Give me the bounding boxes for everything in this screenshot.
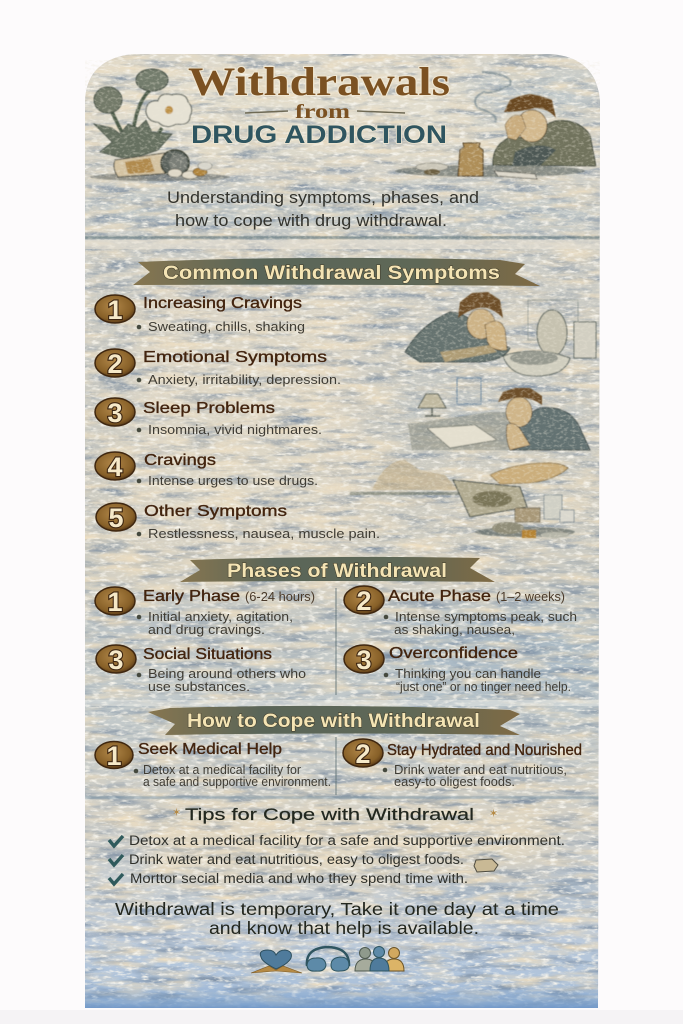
phase: social situations: Being around others who bbox=[148, 666, 306, 681]
illustration grain overlay bbox=[85, 60, 600, 550]
badge 5 bbox=[96, 503, 136, 533]
badge 4 bbox=[95, 452, 135, 482]
coping: stay hydrated bbox=[343, 739, 582, 789]
badge 1: 1 bbox=[107, 587, 123, 617]
badge 2: 2 bbox=[355, 739, 371, 769]
page bottom shadow strip bbox=[0, 1010, 683, 1024]
tips checklist: Detox at a medical facility for a safe and supportive environment. bbox=[129, 833, 565, 848]
subtitle: how to cope with drug withdrawal. bbox=[175, 211, 447, 230]
phase: early: and drug cravings. bbox=[148, 622, 265, 637]
tips heading: Tips for Cope with Withdrawal bbox=[185, 805, 474, 824]
tips heading: ✶ bbox=[489, 808, 498, 820]
coping: stay hydrated: Stay Hydrated and Nourished bbox=[387, 742, 582, 759]
phase: overconfidence: “just one” or no tinger need help. bbox=[396, 679, 571, 694]
check icon 1 bbox=[109, 836, 123, 846]
phase: early: Initial anxiety, agitation, bbox=[148, 609, 293, 624]
phase: early bbox=[95, 587, 315, 637]
phase: social situations bbox=[96, 645, 306, 694]
symptom 5: Restlessness, nausea, muscle pain. bbox=[148, 526, 380, 541]
badge 1 bbox=[95, 295, 135, 325]
badge 1 bbox=[95, 587, 135, 617]
title: from bbox=[295, 101, 350, 123]
illustration: hand offering drug bag bbox=[350, 460, 575, 538]
phase: acute: Acute Phase bbox=[388, 588, 491, 605]
divider: phases columns bbox=[335, 588, 337, 695]
symptom 1 bbox=[95, 295, 305, 334]
heading: phases of withdrawal: Phases of Withdrawal bbox=[227, 561, 447, 582]
icon: small box bbox=[474, 859, 498, 872]
heading: phases of withdrawal bbox=[180, 557, 495, 582]
symptom 1: Sweating, chills, shaking bbox=[148, 319, 305, 334]
check icon 2 bbox=[109, 855, 123, 865]
phase: social situations: Social Situations bbox=[143, 646, 272, 663]
symptom 4: Cravings bbox=[144, 452, 216, 469]
phase: acute: as shaking, nausea, bbox=[394, 622, 515, 637]
symptom 1: Increasing Cravings bbox=[143, 295, 302, 312]
badge 3 bbox=[95, 398, 135, 428]
coping: seek medical help: Detox at a medical facility for bbox=[143, 762, 302, 777]
symptom 2: Anxiety, irritability, depression. bbox=[148, 372, 341, 387]
coping: seek medical help bbox=[95, 741, 331, 789]
tips checklist bbox=[109, 833, 565, 886]
illustration: sleepless man in bed bbox=[408, 378, 590, 450]
illustration: man sick by the toilet bbox=[405, 292, 596, 376]
symptom 3: Sleep Problems bbox=[143, 400, 275, 417]
check icon 3 bbox=[109, 874, 123, 884]
closing message: and know that help is available. bbox=[209, 918, 479, 938]
subtitle bbox=[167, 188, 479, 230]
header illustration: spilled pill bottle bbox=[90, 150, 230, 181]
badge 2: 2 bbox=[107, 349, 123, 379]
tips checklist: Drink water and eat nutritious, easy to oligest foods. bbox=[129, 852, 464, 867]
symptom 3: Insomnia, vivid nightmares. bbox=[148, 422, 322, 437]
phase: overconfidence bbox=[344, 645, 571, 694]
badge 3: 3 bbox=[108, 645, 124, 675]
icon: headphones bbox=[307, 947, 349, 971]
phase: acute bbox=[344, 586, 577, 637]
header illustration: man with head in hand, bottle and pills bbox=[395, 72, 596, 179]
subtitle: Understanding symptoms, phases, and bbox=[167, 188, 479, 207]
icon: group of people bbox=[355, 946, 404, 971]
symptom 4 bbox=[95, 452, 318, 488]
badge 4: 4 bbox=[107, 452, 123, 482]
symptom 3 bbox=[95, 398, 322, 437]
badge 1 bbox=[95, 741, 133, 771]
phase: overconfidence: Overconfidence bbox=[389, 645, 518, 662]
coping: seek medical help: a safe and supportive environment. bbox=[143, 774, 331, 789]
title: Withdrawals bbox=[188, 59, 450, 104]
phase: early: (6-24 hours) bbox=[245, 589, 315, 604]
coping: seek medical help: Seek Medical Help bbox=[138, 741, 282, 758]
icon: heart on open book bbox=[251, 950, 302, 973]
badge 1: 1 bbox=[107, 295, 123, 325]
divider: coping columns bbox=[335, 737, 337, 795]
tips heading: ✶ bbox=[172, 807, 181, 819]
badge 3: 3 bbox=[356, 645, 372, 675]
closing message: Withdrawal is temporary, Take it one day at a time bbox=[115, 899, 559, 919]
phase: acute: (1–2 weeks) bbox=[496, 589, 565, 604]
badge 3 bbox=[96, 645, 136, 675]
heading: how to cope: How to Cope with Withdrawal bbox=[187, 711, 480, 732]
title: DRUG ADDICTION bbox=[191, 121, 447, 149]
panel: textured card background bbox=[80, 50, 605, 1010]
badge 2 bbox=[95, 349, 135, 379]
coping: stay hydrated: easy-to oligest foods. bbox=[394, 774, 515, 789]
phase: overconfidence: Thinking you can handle bbox=[395, 666, 541, 681]
phase: social situations: use substances. bbox=[148, 679, 250, 694]
tips heading bbox=[172, 805, 498, 824]
heading: how to cope bbox=[148, 706, 520, 735]
badge 2 bbox=[344, 586, 384, 616]
header illustration: poppy flowers bbox=[94, 69, 192, 160]
badge 3 bbox=[344, 645, 384, 675]
badge 1: 1 bbox=[106, 741, 122, 771]
symptom 5 bbox=[96, 503, 380, 541]
title bbox=[188, 59, 450, 149]
coping: stay hydrated: Drink water and eat nutritious, bbox=[394, 762, 567, 777]
heading: common withdrawal symptoms: Common Withdrawal Symptoms bbox=[163, 263, 500, 284]
badge 3: 3 bbox=[107, 398, 123, 428]
symptom 2 bbox=[95, 349, 341, 387]
phase: acute: Intense symptoms peak, such bbox=[395, 609, 577, 624]
badge 2: 2 bbox=[356, 586, 372, 616]
symptom 4: Intense urges to use drugs. bbox=[148, 473, 318, 488]
symptom 5: Other Symptoms bbox=[144, 503, 287, 520]
tips checklist: Morttor secial media and who they spend time with. bbox=[130, 871, 468, 886]
badge 2 bbox=[343, 739, 383, 769]
closing message bbox=[115, 899, 559, 938]
heading: common withdrawal symptoms bbox=[133, 258, 540, 286]
phase: early: Early Phase bbox=[143, 588, 240, 605]
badge 5: 5 bbox=[108, 503, 124, 533]
symptom 2: Emotional Symptoms bbox=[143, 349, 327, 366]
